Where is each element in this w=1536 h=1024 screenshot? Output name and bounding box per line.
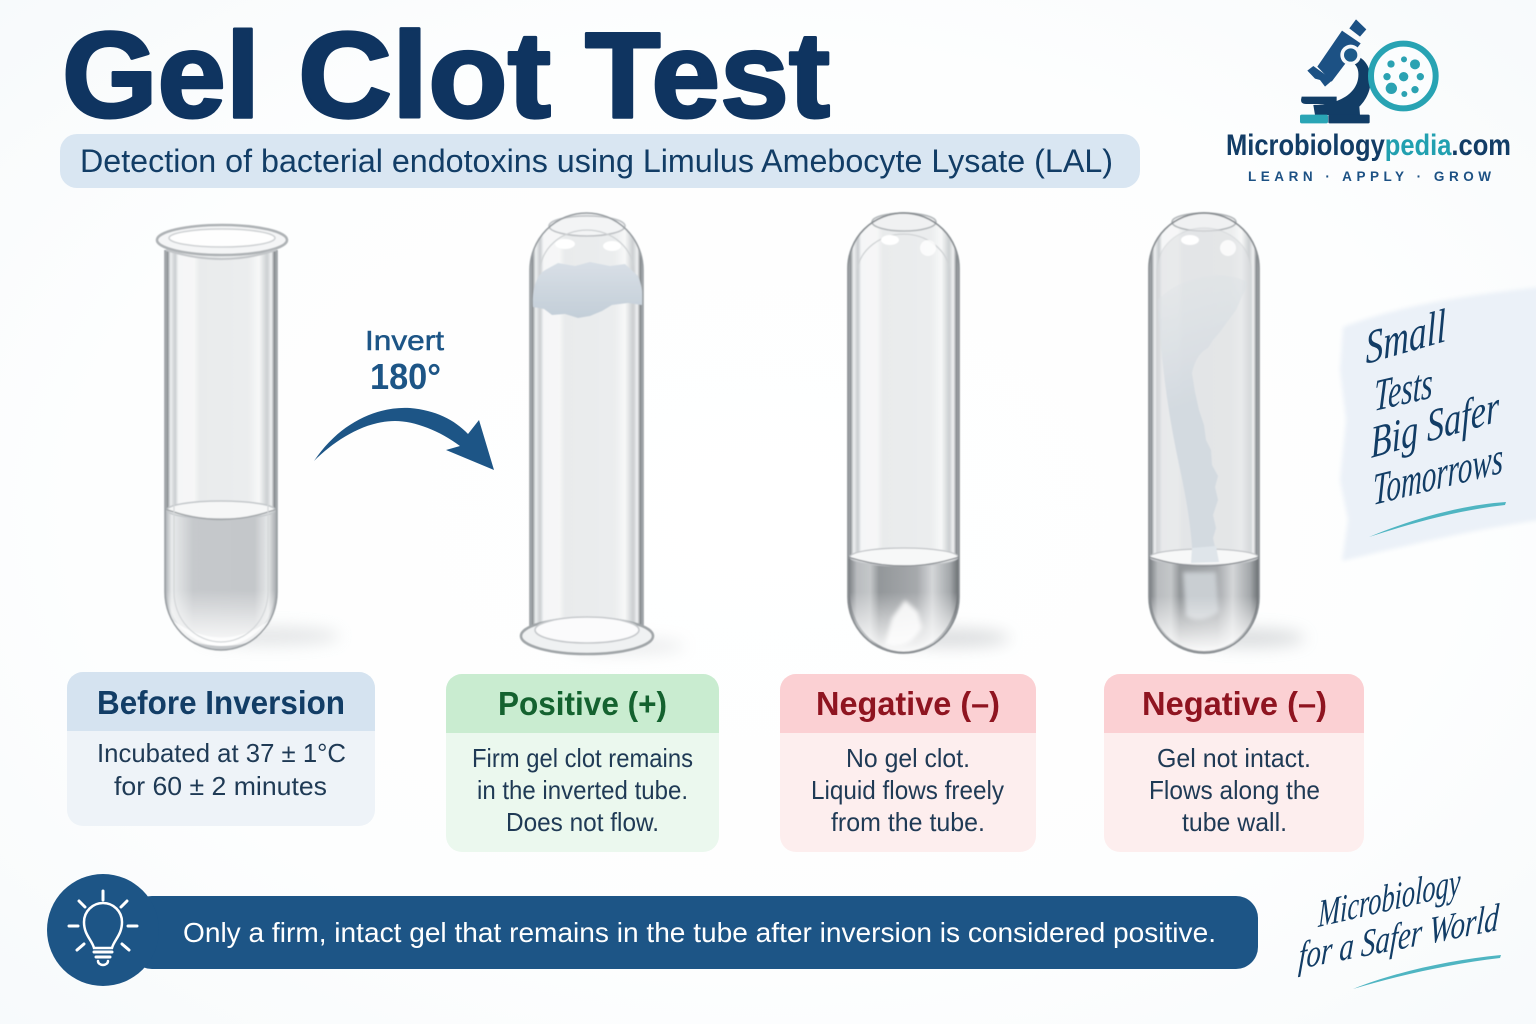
logo wordmark: Microbiologypedia.com [1226, 129, 1511, 162]
arrow: inversion [314, 408, 494, 470]
description [1149, 743, 1320, 837]
logo: Microbiologypedia.com [1226, 19, 1511, 184]
logo tagline: LEARN · APPLY · GROW [1248, 169, 1491, 184]
description [97, 738, 346, 801]
description [472, 743, 693, 837]
description: for 60 ± 2 minutes [114, 771, 327, 801]
description: Gel not intact. [1157, 743, 1311, 773]
callout bar: key takeaway: Only a firm, intact gel that remains in the tube after inversion is considered positive. [183, 917, 1216, 948]
description: from the tube. [831, 807, 985, 837]
callout bar: key takeaway [130, 896, 1258, 969]
description: No gel clot. [846, 743, 970, 773]
label: invert 180 degrees: Invert [365, 325, 444, 356]
handwritten tagline: Tests [1374, 357, 1433, 421]
panel: before inversion [67, 672, 375, 826]
firm gel clot [533, 262, 642, 318]
handwritten tagline [1365, 299, 1503, 515]
teal underline [1369, 502, 1506, 537]
tube: negative, liquid flows freely [848, 213, 1010, 653]
title: Clot [298, 7, 551, 143]
tube: negative, gel flows along wall [1149, 213, 1305, 653]
heading: Positive (+) [498, 685, 667, 722]
callout: brush note [1340, 287, 1536, 561]
description: Liquid flows freely [811, 775, 1004, 805]
title: Test [585, 7, 830, 143]
icon: light bulb [47, 874, 159, 986]
label: invert 180 degrees [365, 325, 444, 397]
heading: Negative (–) [816, 685, 1000, 722]
liquid [165, 508, 277, 650]
tube: before inversion [157, 225, 340, 650]
panel: positive [446, 674, 719, 852]
handwritten slogan [1298, 861, 1501, 989]
liquid [1149, 558, 1259, 653]
heading: Negative (–) [1142, 685, 1327, 722]
title: Gel [62, 7, 260, 143]
label: invert 180 degrees: 180° [370, 356, 441, 397]
description: Does not flow. [506, 807, 659, 837]
panel: negative, no gel clot [780, 674, 1036, 852]
subtitle pill [60, 134, 1140, 188]
handwritten tagline: Big Safer [1370, 380, 1501, 468]
teal underline [1353, 955, 1501, 989]
description: Flows along the [1149, 775, 1320, 805]
description: tube wall. [1182, 807, 1287, 837]
description [811, 743, 1004, 837]
heading: Before Inversion [97, 684, 345, 721]
gel stream [1158, 275, 1248, 560]
description: Firm gel clot remains [472, 743, 693, 773]
icon: microscope and petri dish [1300, 19, 1436, 123]
panel: negative, gel not intact [1104, 674, 1364, 852]
handwritten tagline: Small [1365, 299, 1447, 375]
description: Incubated at 37 ± 1°C [97, 738, 346, 768]
liquid [848, 558, 959, 653]
tube: positive, gel stays at top [521, 213, 685, 654]
handwritten slogan: Microbiology [1317, 861, 1461, 936]
subtitle pill: Detection of bacterial endotoxins using Limulus Amebocyte Lysate (LAL) [80, 143, 1113, 179]
description: in the inverted tube. [477, 775, 688, 805]
